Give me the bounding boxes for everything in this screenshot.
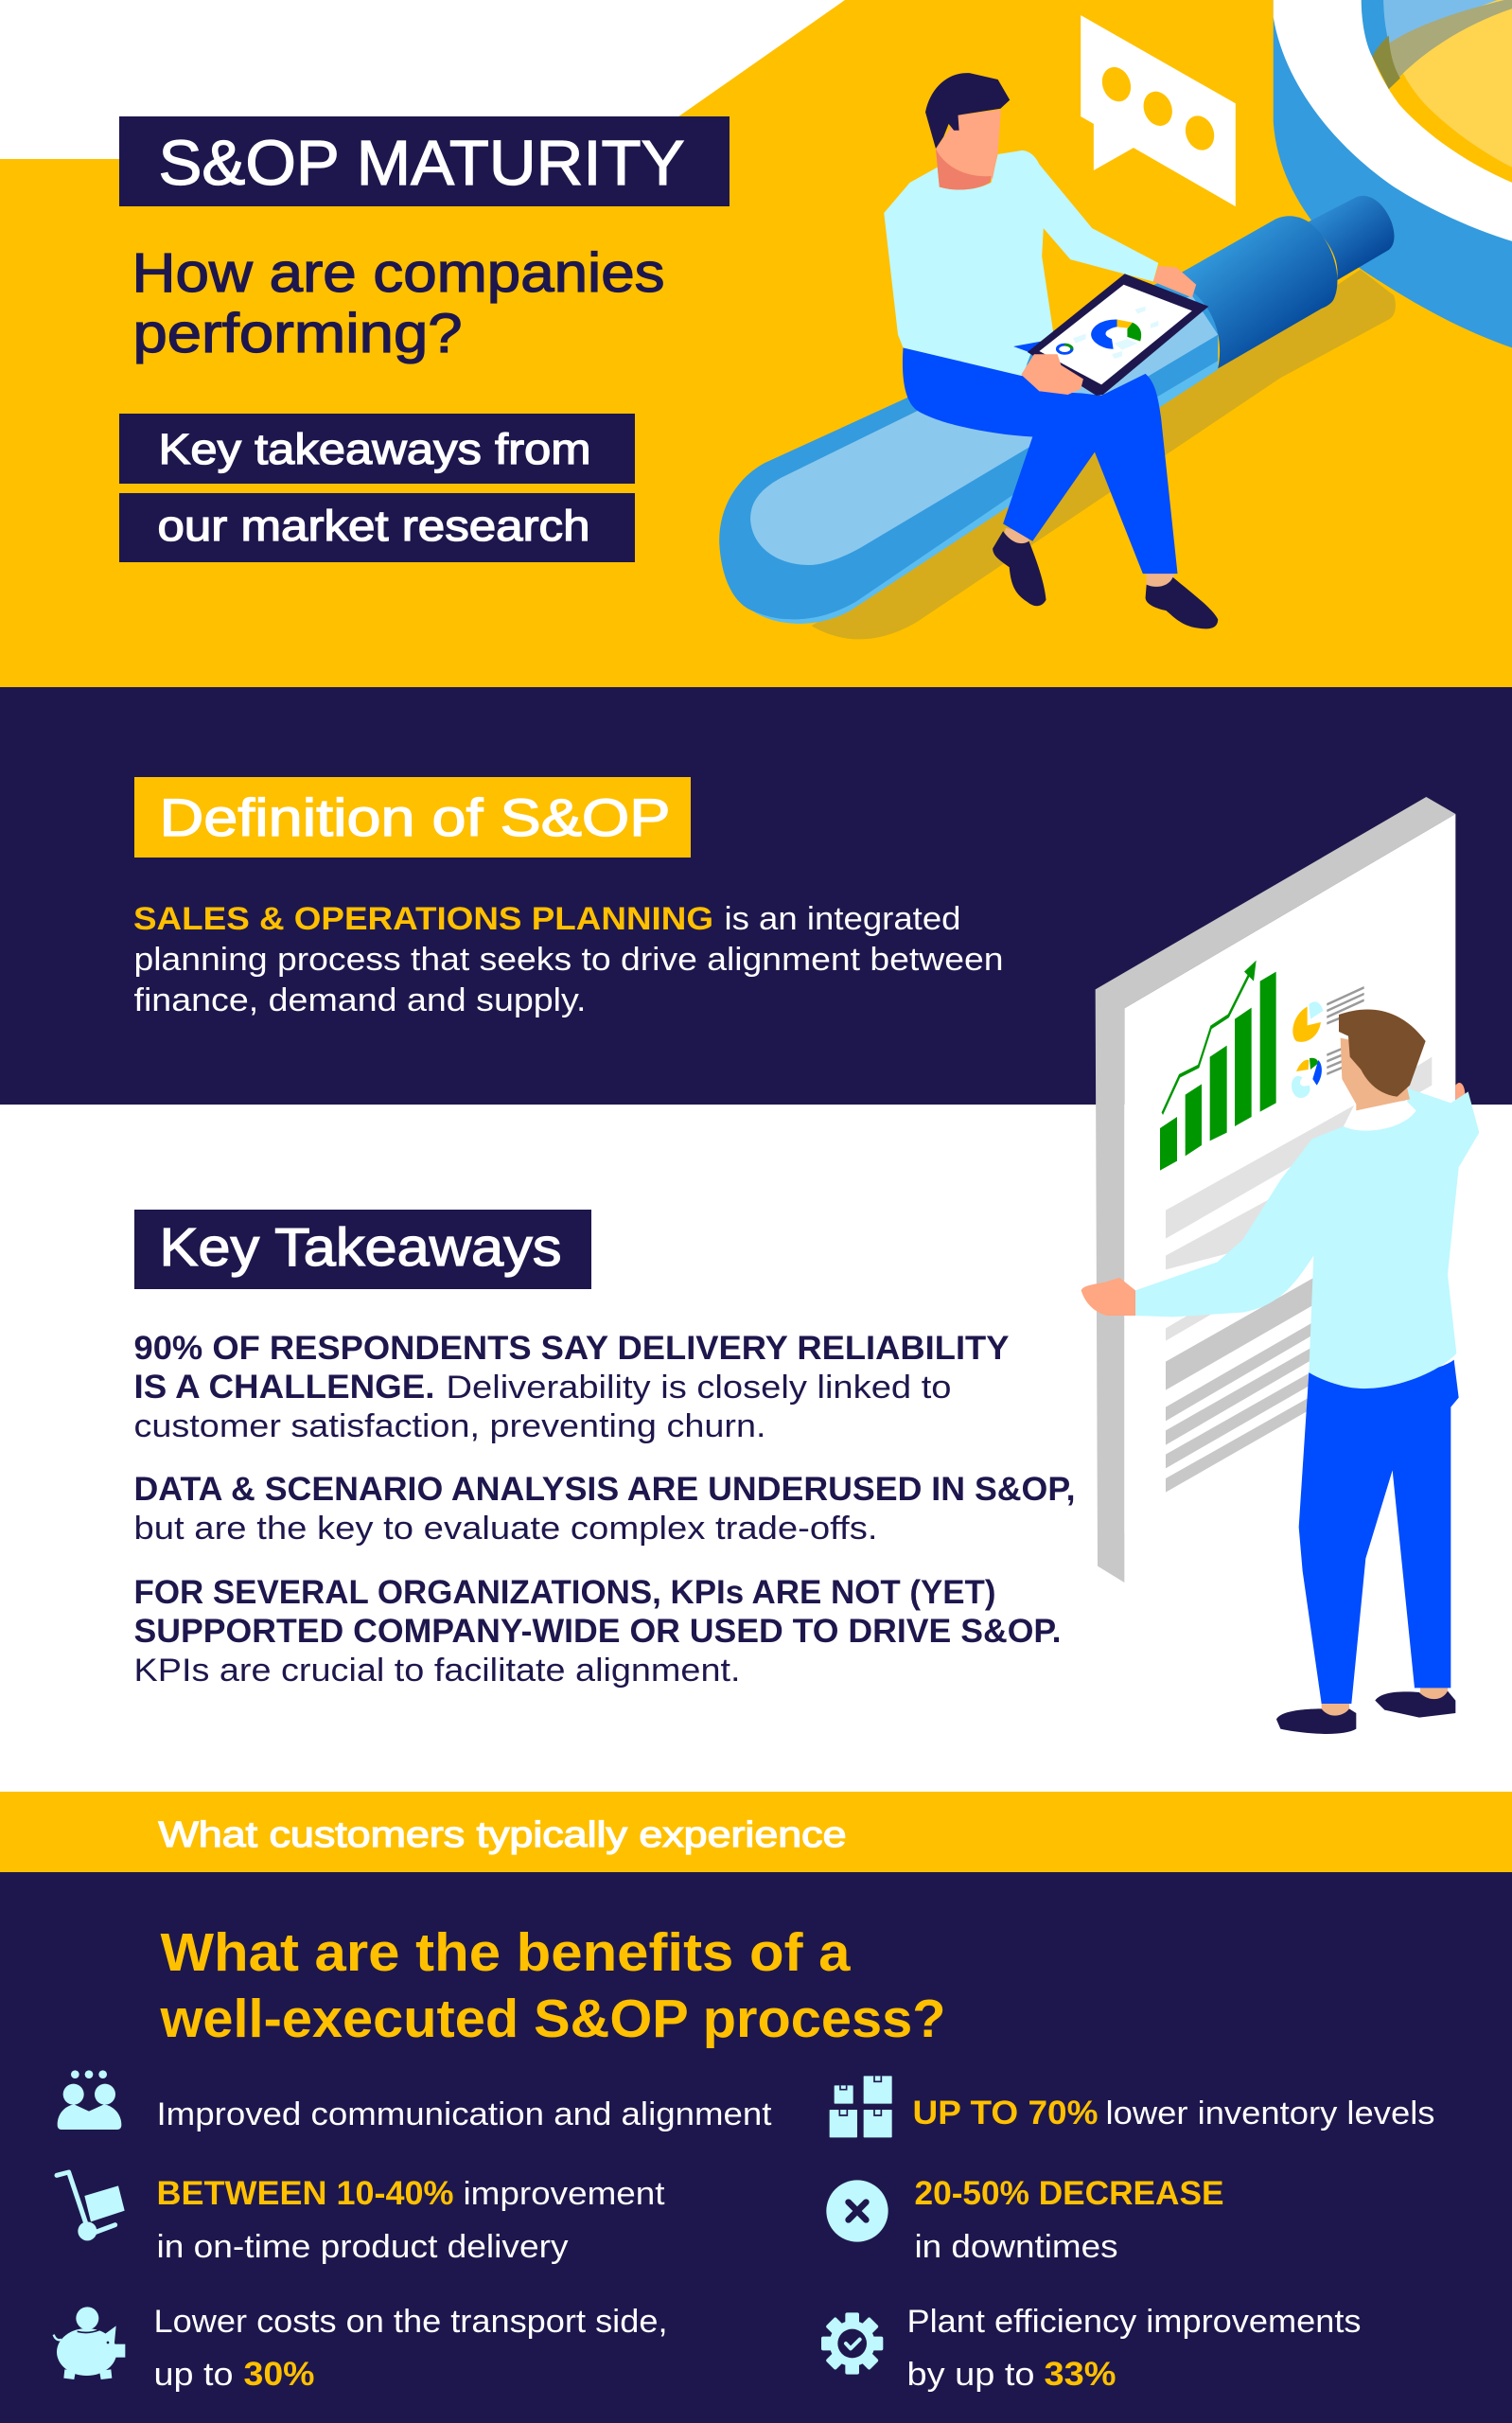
speech bubble bbox=[1081, 15, 1236, 206]
benefit: inventory bbox=[912, 2095, 1434, 2131]
takeaway 2: data and scenario analysis: DATA & SCENARIO ANALYSIS ARE UNDERUSED IN S&OP, bbox=[134, 1471, 1075, 1508]
banner: what customers typically experience: What customers typically experience bbox=[159, 1815, 847, 1855]
magnifying glass lens bbox=[1274, 0, 1512, 347]
subtitle: key takeaways from our market research bbox=[119, 414, 635, 562]
pie charts and legends bbox=[1292, 987, 1364, 1098]
text: definition body bbox=[133, 901, 1003, 1018]
benefit: inventory: lower inventory levels bbox=[1105, 2096, 1434, 2131]
heading: definition bbox=[134, 777, 691, 858]
takeaway 3: KPIs bbox=[134, 1574, 1062, 1689]
takeaway 1: delivery reliability: customer satisfaction, preventing churn. bbox=[134, 1408, 766, 1444]
takeaway 2: data and scenario analysis bbox=[134, 1471, 1075, 1547]
takeaway 2: data and scenario analysis: but are the key to evaluate complex trade-offs. bbox=[134, 1511, 878, 1547]
green bar chart with rising arrow bbox=[1160, 961, 1276, 1171]
panel: definition of S&OP bbox=[0, 687, 1512, 1105]
illustration: person at dashboard board bbox=[1081, 797, 1479, 1734]
panel: key takeaways bbox=[0, 1105, 1512, 1792]
title: S&OP Maturity bbox=[119, 116, 730, 206]
benefit: transport costs: Lower costs on the transport side, bbox=[153, 2304, 668, 2340]
person standing bbox=[1081, 1009, 1479, 1734]
takeaway 3: KPIs: KPIs are crucial to facilitate alignment. bbox=[134, 1653, 740, 1689]
benefit: transport costs: up to bbox=[153, 2357, 233, 2393]
board bbox=[1096, 797, 1455, 1583]
benefit: on-time delivery: in on-time product delivery bbox=[157, 2229, 568, 2265]
icon: gear with check bbox=[821, 2312, 883, 2375]
heading: definition: Definition of S&OP bbox=[159, 787, 670, 847]
heading: benefits question bbox=[159, 1922, 946, 2049]
takeaway 3: KPIs: FOR SEVERAL ORGANIZATIONS, KPIs ARE NOT (YET) bbox=[134, 1574, 995, 1611]
subtitle: key takeaways from our market research: our market research bbox=[157, 502, 590, 550]
benefit: plant efficiency: 33% bbox=[1045, 2356, 1116, 2393]
heading: How are companies performing: performing? bbox=[132, 303, 462, 364]
icon: hand truck bbox=[57, 2172, 125, 2240]
benefit: communication: Improved communication and alignment bbox=[157, 2096, 772, 2132]
subtitle: key takeaways from our market research: Key takeaways from bbox=[159, 425, 590, 473]
benefit: plant efficiency: by up to bbox=[906, 2357, 1035, 2393]
text: definition body: is an integrated bbox=[725, 901, 961, 937]
heading: benefits question: What are the benefits of a bbox=[161, 1922, 852, 1983]
benefit: on-time delivery: improvement bbox=[464, 2176, 665, 2212]
banner: what customers typically experience bbox=[0, 1792, 1512, 1872]
benefit: on-time delivery bbox=[157, 2175, 665, 2265]
handle shadow bbox=[812, 270, 1396, 639]
benefit: downtime: in downtimes bbox=[914, 2229, 1118, 2265]
benefit: transport costs bbox=[153, 2304, 668, 2393]
panel: benefits bbox=[0, 1872, 1512, 2423]
heading: key takeaways: Key Takeaways bbox=[159, 1217, 562, 1278]
benefit: downtime bbox=[914, 2175, 1224, 2265]
icon: people communicating bbox=[58, 2070, 121, 2130]
heading: benefits question: well-executed S&OP process? bbox=[159, 1989, 946, 2049]
takeaway 1: delivery reliability: 90% OF RESPONDENTS SAY DELIVERY RELIABILITY bbox=[134, 1330, 1009, 1367]
heading: How are companies performing: How are companies bbox=[132, 242, 664, 304]
text: definition body: finance, demand and supply. bbox=[134, 982, 587, 1018]
icon: x in circle bbox=[826, 2180, 888, 2242]
heading: key takeaways bbox=[134, 1210, 591, 1289]
icon: piggy bank bbox=[54, 2307, 125, 2379]
benefit: transport costs: 30% bbox=[244, 2356, 314, 2393]
takeaway 1: delivery reliability bbox=[134, 1330, 1009, 1444]
takeaway 1: delivery reliability: Deliverability is closely linked to bbox=[447, 1370, 952, 1406]
benefit: plant efficiency: Plant efficiency improvements bbox=[906, 2304, 1361, 2340]
illustration: person on magnifying glass bbox=[719, 0, 1512, 639]
magnifying glass handle bbox=[719, 196, 1394, 624]
panel: header bbox=[0, 0, 1512, 688]
person sitting bbox=[884, 73, 1218, 628]
title: S&OP Maturity: S&OP MATURITY bbox=[159, 128, 685, 199]
tablet with donut chart bbox=[1021, 274, 1208, 396]
text: definition body: planning process that seeks to drive alignment between bbox=[134, 942, 1003, 978]
benefit: inventory: UP TO 70% bbox=[912, 2095, 1098, 2131]
benefit: on-time delivery: BETWEEN 10-40% bbox=[157, 2175, 454, 2212]
benefit: downtime: 20-50% DECREASE bbox=[914, 2175, 1224, 2212]
heading: How are companies performing bbox=[132, 242, 664, 364]
icon: stacked boxes bbox=[830, 2076, 892, 2137]
text: definition body: SALES & OPERATIONS PLANNING bbox=[133, 901, 713, 937]
benefit: plant efficiency bbox=[906, 2304, 1361, 2393]
takeaway 3: KPIs: SUPPORTED COMPANY-WIDE OR USED TO DRIVE S&OP. bbox=[134, 1613, 1062, 1650]
takeaway 1: delivery reliability: IS A CHALLENGE. bbox=[134, 1369, 435, 1406]
